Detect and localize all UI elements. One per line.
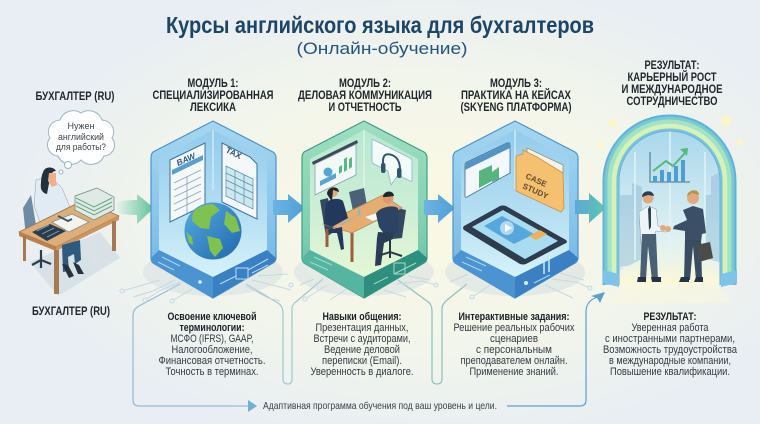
arrowhead: to result bbox=[591, 292, 605, 303]
text: module 1: терминологии: bbox=[180, 322, 244, 334]
thought bubble: английский bbox=[58, 132, 104, 143]
connector lines bbox=[133, 279, 600, 406]
icon: presentation screen bbox=[312, 140, 358, 195]
title: Курсы английского языка для бухгалтеров bbox=[166, 12, 594, 38]
text: module 3: Применение знаний. bbox=[470, 366, 558, 378]
arrow: module 1 to module 2 bbox=[273, 194, 305, 223]
heading: accountant top: БУХГАЛТЕР (RU) bbox=[36, 89, 114, 103]
panel: module 2: МОДУЛЬ 2: bbox=[339, 76, 391, 90]
arrow: module 2 to module 3 bbox=[424, 194, 455, 223]
illustration: result arch bbox=[597, 116, 743, 303]
icon: law document bbox=[170, 143, 205, 222]
text: module 1: МСФО (IFRS), GAAP, bbox=[170, 333, 254, 345]
heading: result bbox=[622, 58, 722, 108]
panel: module 1: МОДУЛЬ 1: bbox=[188, 76, 238, 90]
text: result: РЕЗУЛЬТАТ: bbox=[644, 311, 696, 323]
text: result: с иностранными партнерами, bbox=[605, 333, 735, 345]
heading: result: РЕЗУЛЬТАТ: bbox=[644, 58, 700, 72]
arrow: module 3 to result bbox=[575, 193, 606, 223]
text: result: Уверенная работа bbox=[632, 322, 709, 334]
icon: video window bbox=[465, 142, 510, 197]
icon: case study folder: STUDY bbox=[521, 182, 550, 201]
figure: man in shirt bbox=[637, 191, 667, 282]
sparkles bbox=[597, 116, 743, 147]
text: module 2: Презентация данных, bbox=[316, 322, 408, 334]
text: result: Повышение квалификации. bbox=[610, 366, 730, 378]
arrowhead: feedback line bbox=[248, 400, 257, 412]
text: module 3: преподавателем онлайн. bbox=[460, 355, 568, 367]
panel: module 1: ЛЕКСИКА bbox=[190, 100, 236, 114]
icon: meeting bbox=[320, 187, 406, 266]
panel: module 3: (SKYENG ПЛАТФОРМА) bbox=[460, 100, 572, 114]
panel: module 2: ДЕЛОВАЯ КОММУНИКАЦИЯ bbox=[298, 88, 432, 102]
text: module 2: переписки (Email). bbox=[322, 355, 402, 367]
heading: accountant bottom: БУХГАЛТЕР (RU) bbox=[32, 304, 110, 318]
panel: module 3: ПРАКТИКА НА КЕЙСАХ bbox=[461, 87, 571, 102]
icon: law document: BAW bbox=[175, 150, 198, 168]
panel: module 1: СПЕЦИАЛИЗИРОВАННАЯ bbox=[152, 88, 274, 102]
arrow: accountant to module 1 bbox=[115, 194, 154, 224]
adaptive note: Адаптивная программа обучения под ваш уровень и цели. bbox=[263, 400, 497, 412]
subtitle: (Онлайн-обучение) bbox=[296, 39, 468, 58]
icon: case study folder: CASE bbox=[524, 172, 549, 189]
text: result: в международные компании, bbox=[609, 355, 731, 367]
thought bubble: Нужен bbox=[68, 121, 94, 132]
icon: tax document bbox=[222, 143, 257, 219]
text: module 3: сценариев bbox=[490, 333, 538, 345]
icon: case study folder bbox=[516, 148, 564, 212]
icon: growth chart bbox=[650, 148, 690, 182]
text: module 2: Уверенность в диалоге. bbox=[310, 366, 414, 378]
text: module 3: Интерактивные задания: bbox=[458, 311, 570, 323]
panel: module 2: И ОТЧЕТНОСТЬ bbox=[328, 100, 402, 114]
text: module 2 bbox=[310, 311, 414, 378]
thought bubble: для работы? bbox=[56, 142, 106, 153]
icon: headset bubble bbox=[372, 140, 412, 185]
icon: accountant at desk bbox=[19, 167, 120, 296]
text: module 3: Решение реальных рабочих bbox=[454, 322, 575, 334]
text: result: Возможность трудоустройства bbox=[603, 344, 738, 356]
heading: result: И МЕЖДУНАРОДНОЕ bbox=[622, 82, 722, 96]
icon: globe bbox=[184, 202, 242, 260]
text: module 2: Встречи с аудиторами, bbox=[314, 333, 410, 345]
figure: man in suit bbox=[665, 190, 713, 282]
icon: tax document: TAX bbox=[224, 145, 244, 161]
text: module 1: Финансовая отчетность. bbox=[158, 355, 266, 367]
panel: module 1 bbox=[143, 76, 283, 298]
text: module 3: с персональным bbox=[476, 344, 552, 356]
panel: module 3 bbox=[445, 76, 585, 298]
thought bubble bbox=[47, 111, 115, 174]
heading: result: СОТРУДНИЧЕСТВО bbox=[626, 94, 718, 108]
text: module 3 bbox=[454, 311, 575, 378]
text: module 1: Освоение ключевой bbox=[168, 311, 257, 323]
panel: module 3: МОДУЛЬ 3: bbox=[490, 76, 542, 90]
text: result bbox=[603, 311, 738, 378]
text: module 2: Ведение деловой bbox=[324, 344, 400, 356]
panel: module 2 bbox=[294, 76, 434, 298]
text: module 2: Навыки общения: bbox=[322, 311, 402, 323]
text: module 1: Точность в терминах. bbox=[166, 366, 258, 378]
text: module 1 bbox=[158, 311, 266, 378]
heading: result: КАРЬЕРНЫЙ РОСТ bbox=[628, 69, 717, 84]
icon: tablet bbox=[463, 206, 567, 264]
text: module 1: Налогообложение, bbox=[172, 344, 252, 356]
circuit traces bbox=[120, 273, 592, 303]
